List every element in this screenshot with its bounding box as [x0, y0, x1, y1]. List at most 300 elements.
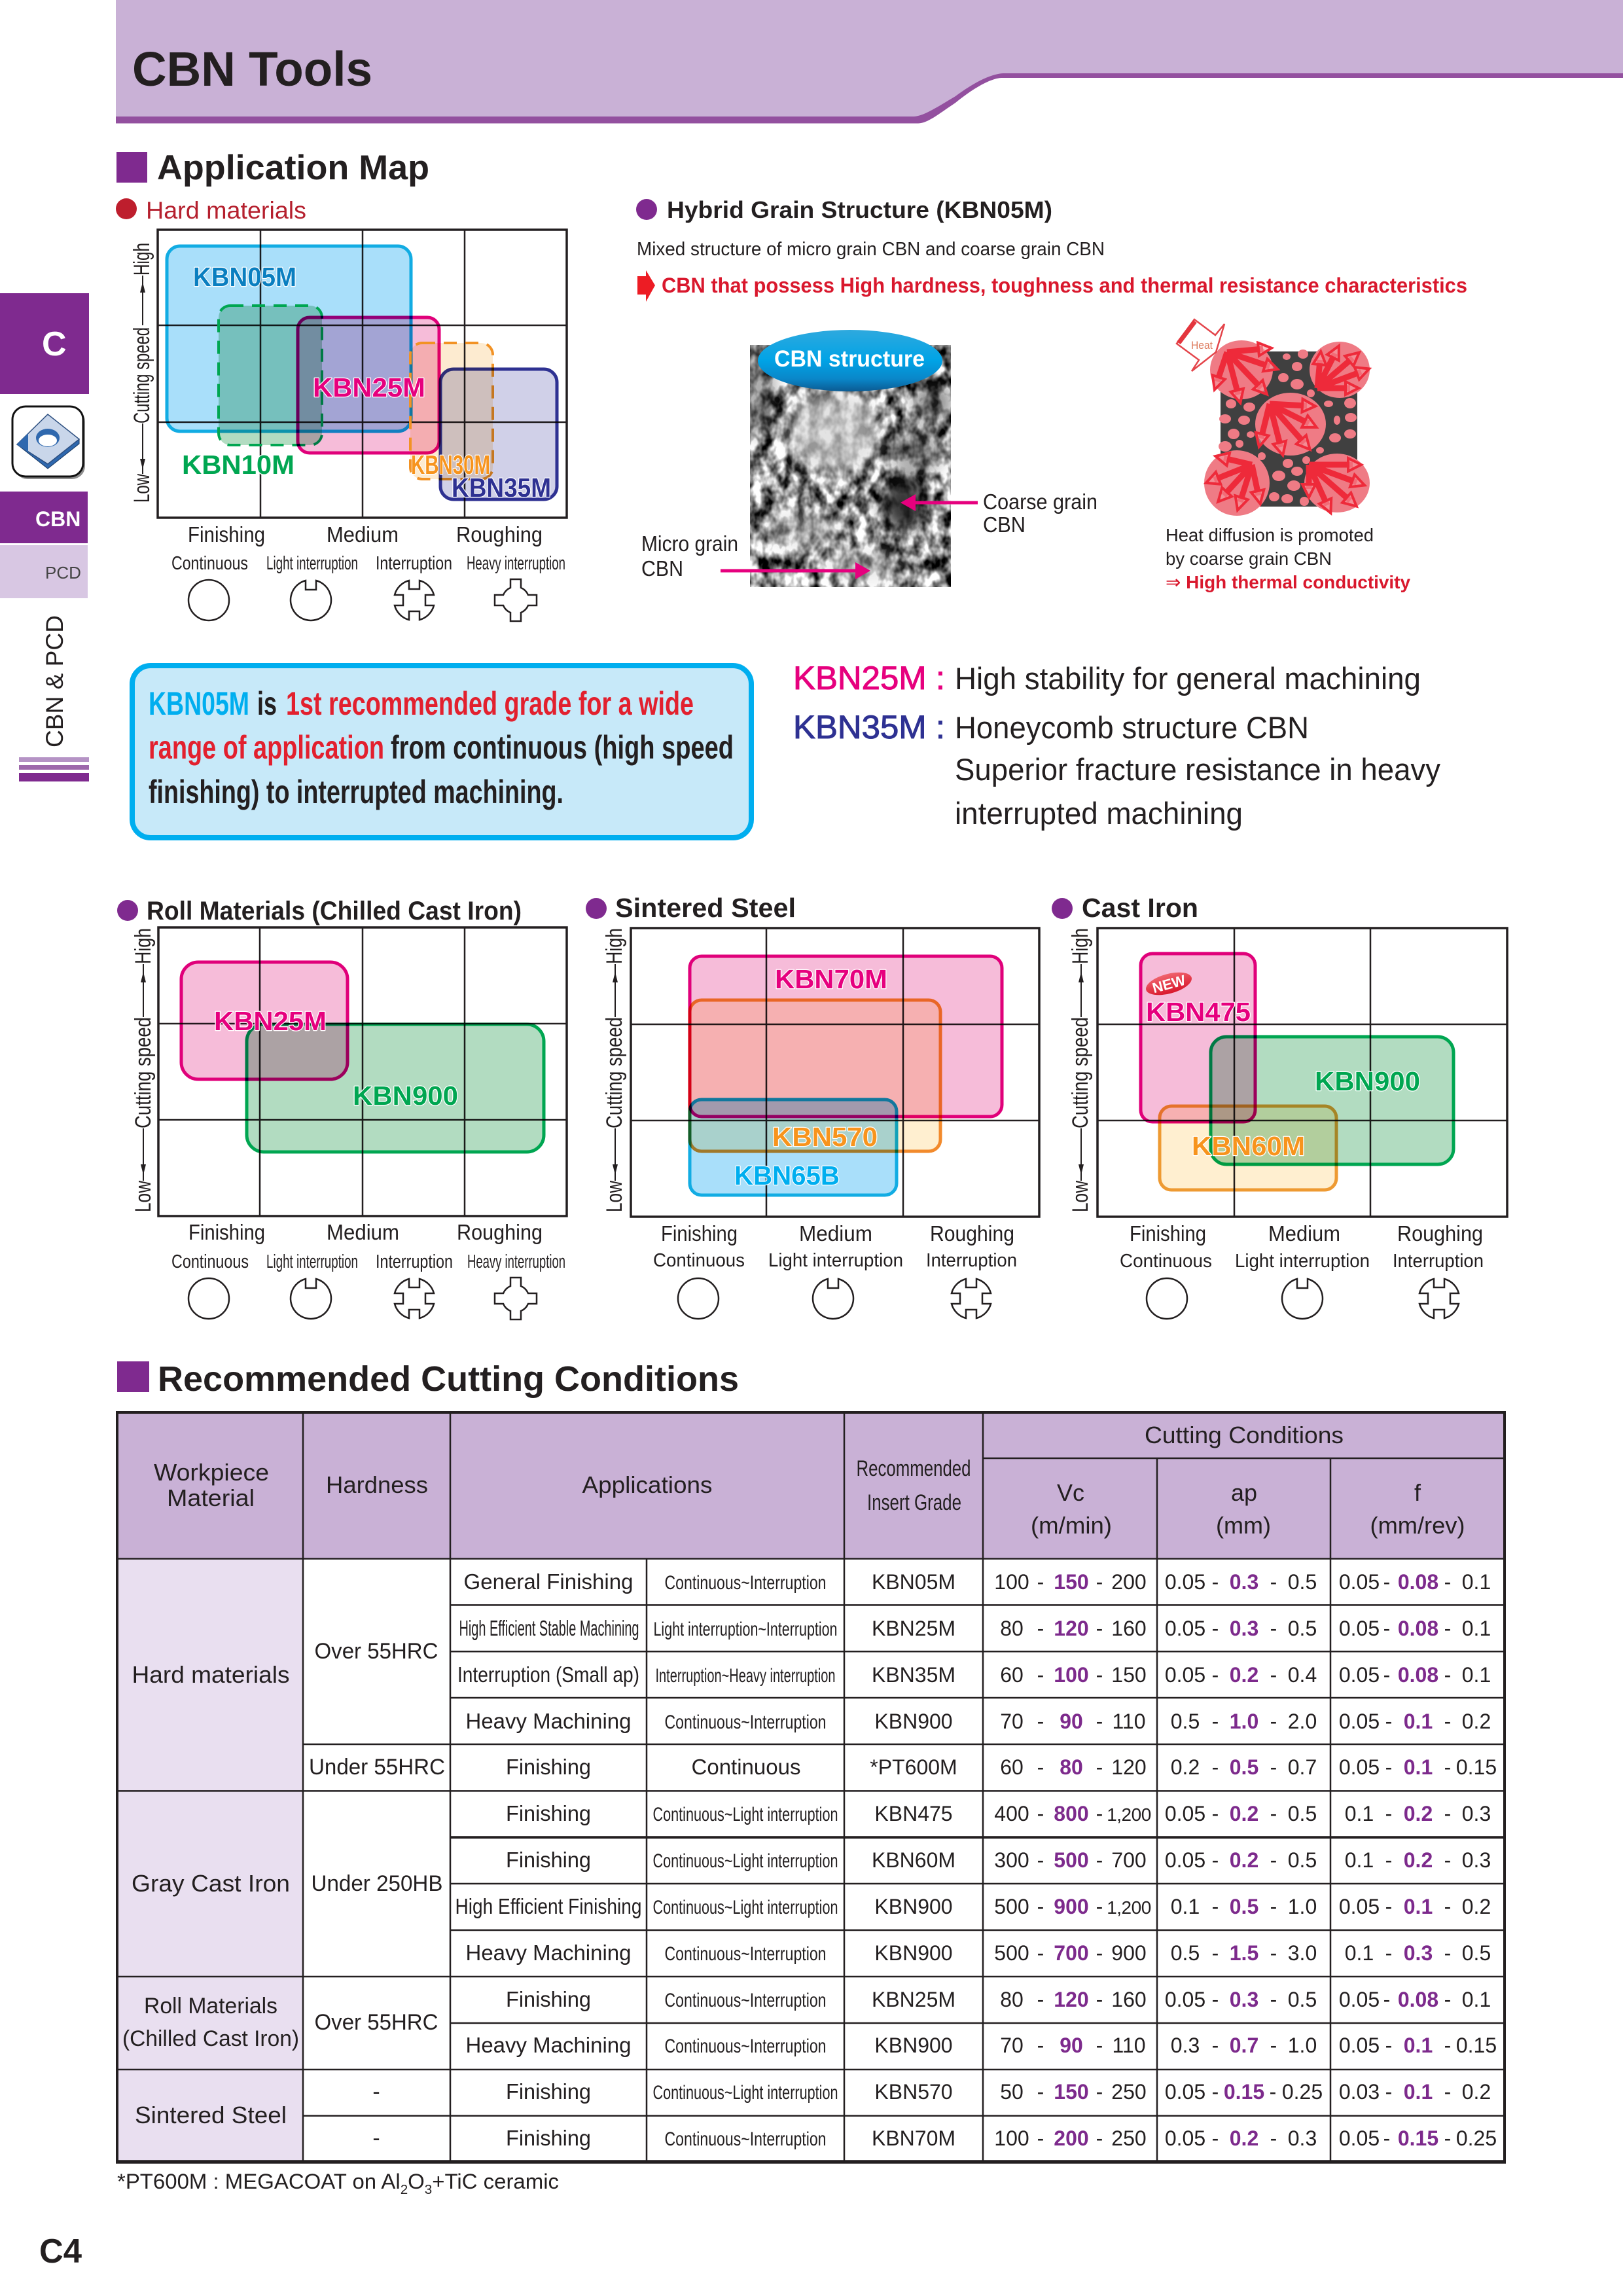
application column: General Finishing	[463, 1570, 633, 1594]
ap values: 0.05	[1165, 1988, 1205, 2011]
ap values: 0.2	[1230, 1802, 1258, 1825]
callout: Micro grain: Micro grain	[641, 531, 738, 556]
y axis: Low	[602, 1181, 627, 1212]
labels: KBN05M	[193, 262, 296, 292]
ap values: -	[1270, 1895, 1277, 1918]
footnote: +TiC ceramic	[432, 2170, 559, 2193]
ap values: 0.5	[1288, 1570, 1317, 1594]
workpiece material column	[122, 1661, 299, 2128]
text block: KBN25M and KBN35M notes: KBN25M :	[793, 660, 945, 696]
x axis labels: Interruption	[1393, 1251, 1484, 1272]
ap values: 0.5	[1288, 1802, 1317, 1825]
ap values: -	[1212, 1663, 1219, 1687]
Vc values: 150	[1054, 1570, 1089, 1594]
grade column: KBN900	[874, 1710, 953, 1733]
Vc values: 120	[1054, 1988, 1089, 2011]
Vc values: -	[1037, 1848, 1044, 1872]
y axis: Low	[131, 1181, 156, 1212]
grade column: KBN70M	[872, 2126, 955, 2150]
interruption column	[653, 1572, 838, 2150]
f values: 0.1	[1462, 1617, 1491, 1640]
icon: heat arrow: Heat	[1191, 339, 1213, 351]
ap values: -	[1212, 1848, 1219, 1872]
Vc values: 1,200	[1107, 1804, 1151, 1825]
description: Mixed structure of micro grain CBN and coarse grain CBN	[637, 239, 1105, 260]
footnote: *PT600M : MEGACOAT on Al	[117, 2170, 392, 2193]
f values: 0.1	[1462, 1570, 1491, 1594]
f values: 0.1	[1345, 1802, 1374, 1825]
x axis labels: Roughing	[930, 1221, 1014, 1246]
tab: PCD: PCD	[45, 563, 81, 583]
ap values: 0.05	[1165, 2126, 1205, 2150]
header row: (mm/rev)	[1370, 1512, 1465, 1539]
text block: KBN25M and KBN35M notes: Honeycomb structure CBN	[955, 710, 1309, 745]
red statement with arrow: CBN that possess High hardness, toughness and thermal resistance characteristics	[662, 274, 1467, 297]
f values: -	[1383, 1570, 1390, 1594]
heading: Application Map: Application Map	[157, 149, 429, 187]
labels: KBN70M	[775, 964, 887, 994]
application column: Finishing	[506, 1987, 591, 2011]
application column: Finishing	[506, 2126, 591, 2150]
ap values: 0.2	[1230, 2126, 1258, 2150]
f values: 0.1	[1345, 1941, 1374, 1965]
f values: 0.3	[1462, 1802, 1491, 1825]
f values: -	[1385, 2080, 1392, 2104]
x axis labels: Medium	[799, 1221, 872, 1246]
ap values: 0.05	[1165, 1663, 1205, 1687]
Vc values: -	[1096, 1988, 1103, 2011]
Vc values: -	[1037, 1895, 1044, 1918]
grade column: KBN60M	[872, 1848, 955, 1872]
ap values: -	[1212, 1570, 1219, 1594]
header banner with title	[116, 0, 1623, 123]
Vc values: -	[1037, 1941, 1044, 1965]
ap values: 0.7	[1288, 1755, 1317, 1779]
Vc values: -	[1096, 1895, 1103, 1918]
caption: heat diffusion: by coarse grain CBN	[1166, 548, 1332, 569]
badge: NEW	[1143, 968, 1194, 999]
region KBN900	[247, 1024, 544, 1152]
f values: 0.05	[1339, 2034, 1380, 2057]
labels	[1146, 997, 1420, 1161]
labels: KBN900	[1315, 1066, 1420, 1096]
labels: KBN65B	[734, 1160, 840, 1191]
Vc values: 60	[1000, 1755, 1024, 1779]
ap values: -	[1270, 1570, 1277, 1594]
f values: -	[1385, 1755, 1392, 1779]
f values: 0.2	[1404, 1802, 1433, 1825]
ap values: -	[1212, 1941, 1219, 1965]
grade column: KBN570	[874, 2080, 953, 2104]
application column: Finishing	[506, 2079, 591, 2104]
ap values: -	[1270, 1802, 1277, 1825]
hardness column: Over 55HRC	[314, 2010, 438, 2035]
grade column: KBN05M	[872, 1570, 955, 1594]
grade column: KBN900	[874, 1895, 953, 1918]
icon: CBN insert	[12, 406, 85, 479]
region KBN65B	[690, 1100, 897, 1195]
grade column: KBN25M	[872, 1988, 955, 2011]
f values: 0.05	[1339, 1663, 1380, 1687]
Vc values: 50	[1000, 2080, 1024, 2104]
ap values: -	[1212, 2080, 1219, 2104]
ap values: -	[1212, 1755, 1219, 1779]
ap values: -	[1270, 2080, 1276, 2104]
f values: 0.1	[1404, 1755, 1433, 1779]
Vc values: 120	[1111, 1755, 1147, 1779]
interruption column: Continuous~Light interruption	[653, 1897, 838, 1918]
Vc values: -	[1096, 1570, 1103, 1594]
ap values: 0.4	[1288, 1663, 1317, 1687]
photo: CBN structure	[743, 330, 952, 587]
Vc values: 80	[1000, 1617, 1024, 1640]
Vc values: -	[1037, 1710, 1044, 1733]
header row: Cutting Conditions	[1145, 1422, 1344, 1448]
application column: Finishing	[506, 1755, 591, 1779]
cut icons	[678, 1278, 991, 1319]
f values: -	[1444, 1988, 1451, 2011]
table: recommended cutting conditions	[116, 1412, 1506, 2162]
x axis labels	[1120, 1221, 1484, 1272]
f values: 0.05	[1339, 1895, 1380, 1918]
ap values: 0.5	[1230, 1895, 1258, 1918]
region KBN05M	[167, 246, 411, 431]
Vc values: 110	[1112, 2034, 1146, 2057]
ap values: 0.7	[1230, 2034, 1258, 2057]
ap values: 0.3	[1288, 2126, 1317, 2150]
Vc values: -	[1037, 2080, 1044, 2104]
Vc values: 150	[1111, 1663, 1147, 1687]
caption: heat diffusion: ⇒ High thermal conductivity	[1166, 572, 1410, 592]
tab: CBN	[0, 492, 88, 543]
hardness column: -	[372, 2079, 380, 2104]
f values: 0.05	[1339, 2126, 1380, 2150]
workpiece material column: (Chilled Cast Iron)	[122, 2026, 299, 2051]
icon: heat arrow	[1177, 319, 1224, 371]
application column: Finishing	[506, 1801, 591, 1825]
x axis labels: Roughing	[456, 522, 543, 547]
ap values	[1165, 1570, 1323, 2150]
f values: -	[1383, 1663, 1390, 1687]
Vc values: 120	[1054, 1617, 1089, 1640]
f values: 0.05	[1339, 1710, 1380, 1733]
f values: 0.15	[1456, 1755, 1497, 1779]
x axis labels: Medium	[327, 1220, 399, 1244]
Vc values: 800	[1054, 1802, 1089, 1825]
f values: -	[1385, 1895, 1392, 1918]
f values: -	[1385, 1941, 1392, 1965]
header row: ap	[1231, 1479, 1257, 1506]
f values: -	[1444, 1570, 1451, 1594]
Vc values: -	[1096, 2080, 1103, 2104]
f values: -	[1444, 1848, 1451, 1872]
callout: Micro grain	[641, 531, 870, 581]
region KBN70M	[690, 956, 1002, 1117]
Vc values: 160	[1111, 1988, 1147, 2011]
tab: PCD	[0, 545, 88, 598]
grade column: KBN35M	[872, 1663, 955, 1687]
Vc values: -	[1037, 2126, 1044, 2150]
f values: 0.15	[1398, 2126, 1438, 2150]
labels: KBN900	[353, 1081, 458, 1111]
ap values: 0.15	[1224, 2080, 1264, 2104]
interruption column: Light interruption~Interruption	[653, 1619, 838, 1640]
ap values: 0.05	[1165, 2080, 1205, 2104]
panel: Hybrid grain structure	[636, 196, 1467, 592]
header row: Vc	[1057, 1479, 1084, 1506]
x axis labels: Light interruption	[768, 1250, 903, 1271]
Vc values: -	[1037, 1570, 1044, 1594]
ap values: 1.5	[1230, 1941, 1258, 1965]
Vc values: -	[1037, 1617, 1044, 1640]
header row: Material	[167, 1484, 255, 1511]
callout: KBN05M recommendation: range of application	[149, 729, 384, 766]
region KBN10M	[219, 306, 322, 445]
x axis labels: Heavy interruption	[467, 1251, 565, 1272]
cut icons	[188, 579, 537, 621]
ap values: -	[1270, 1755, 1277, 1779]
text block: KBN25M and KBN35M notes: Superior fracture resistance in heavy	[955, 752, 1440, 787]
text block: KBN25M and KBN35M notes: interrupted machining	[955, 796, 1243, 831]
ap values: 0.05	[1165, 1570, 1205, 1594]
f values: -	[1385, 1848, 1392, 1872]
hardness column	[309, 1639, 445, 2151]
region KBN60M	[1160, 1106, 1336, 1190]
interruption column: Continuous	[691, 1755, 801, 1779]
ap values: -	[1212, 2126, 1219, 2150]
f values: 0.05	[1339, 1988, 1380, 2011]
Vc values: 300	[994, 1848, 1029, 1872]
hardness column: Under 250HB	[312, 1871, 442, 1896]
f values: 0.1	[1462, 1663, 1491, 1687]
application column: Heavy Machining	[466, 1941, 631, 1965]
ap values: -	[1212, 1988, 1219, 2011]
Vc values: 100	[994, 2126, 1029, 2150]
Vc values: 200	[1054, 2126, 1089, 2150]
Vc values: 400	[994, 1802, 1029, 1825]
ap values: 1.0	[1230, 1710, 1258, 1733]
caption: heat diffusion: Heat diffusion is promoted	[1166, 525, 1374, 545]
Vc values: 100	[994, 1570, 1029, 1594]
f values: 0.08	[1398, 1617, 1438, 1640]
Vc values: 900	[1111, 1941, 1147, 1965]
Vc values: -	[1096, 1848, 1103, 1872]
interruption column: Continuous~Light interruption	[653, 2082, 838, 2104]
x axis labels: Light interruption	[266, 1251, 358, 1272]
labels: KBN10M	[182, 450, 294, 480]
callout: KBN05M recommendation	[132, 666, 751, 838]
f values: -	[1444, 2126, 1451, 2150]
labels: KBN25M	[214, 1006, 327, 1036]
Vc values: -	[1037, 1988, 1044, 2011]
f values: 0.1	[1345, 1848, 1374, 1872]
tab: CBN: CBN	[35, 507, 80, 531]
f values: 0.1	[1404, 2080, 1433, 2104]
labels	[214, 1006, 458, 1111]
region KBN25M	[181, 962, 348, 1079]
cut icons	[1147, 1278, 1459, 1319]
ap values: -	[1270, 1710, 1277, 1733]
footnote: O	[408, 2170, 425, 2193]
Vc values: 90	[1060, 2034, 1083, 2057]
interruption column: Continuous~Interruption	[665, 2036, 826, 2057]
panel: Roll materials chart	[117, 897, 567, 1319]
f values: -	[1383, 1988, 1390, 2011]
ap values: 0.5	[1288, 1617, 1317, 1640]
f values: -	[1444, 1802, 1451, 1825]
subheading: Sintered Steel	[615, 893, 796, 923]
labels: KBN35M	[452, 473, 551, 503]
Vc values: 150	[1054, 2080, 1089, 2104]
ap values: -	[1212, 1802, 1219, 1825]
x axis labels: Interruption	[376, 1251, 453, 1272]
ap values: -	[1270, 1941, 1277, 1965]
x axis labels: Interruption	[376, 553, 452, 574]
ap values: -	[1270, 2126, 1277, 2150]
y axis: High	[130, 243, 154, 276]
callout: KBN05M recommendation: is	[257, 685, 277, 722]
f values: 0.08	[1398, 1663, 1438, 1687]
hardness column: Under 55HRC	[309, 1755, 445, 1780]
header row: Applications	[582, 1471, 712, 1498]
Vc values: -	[1096, 1802, 1103, 1825]
ap values: 0.05	[1165, 1617, 1205, 1640]
y axis	[131, 928, 156, 1212]
title: CBN Tools	[132, 42, 372, 96]
hardness column: -	[372, 2126, 380, 2151]
ap values: -	[1270, 1663, 1277, 1687]
ap values: 0.5	[1288, 1848, 1317, 1872]
interruption column: Continuous~Interruption	[665, 1943, 826, 1965]
interruption column: Continuous~Light interruption	[653, 1804, 838, 1825]
grade column: KBN475	[874, 1802, 953, 1825]
f values: 0.5	[1462, 1941, 1491, 1965]
f values: 0.1	[1404, 2034, 1433, 2057]
f values: -	[1444, 1663, 1451, 1687]
ap values: 0.2	[1230, 1848, 1258, 1872]
Vc values: -	[1096, 2126, 1103, 2150]
ap values: 0.3	[1230, 1570, 1258, 1594]
footnote: 3	[425, 2183, 432, 2197]
y axis: High	[1068, 928, 1093, 964]
callout: KBN05M recommendation: KBN05M	[149, 685, 249, 722]
text block: KBN25M and KBN35M notes: High stability for general machining	[955, 661, 1421, 696]
f values: 0.08	[1398, 1988, 1438, 2011]
x axis labels: Heavy interruption	[467, 553, 565, 574]
f values: 0.2	[1462, 1710, 1491, 1733]
Vc values: 80	[1000, 1988, 1024, 2011]
f values: 0.05	[1339, 1570, 1380, 1594]
ap values: 0.2	[1171, 1755, 1200, 1779]
header row: (m/min)	[1031, 1512, 1112, 1539]
header row: f	[1414, 1479, 1421, 1506]
Vc values: -	[1096, 1710, 1103, 1733]
Vc values: 70	[1000, 1710, 1024, 1733]
ap values: 0.3	[1171, 2034, 1200, 2057]
f values: 0.1	[1404, 1895, 1433, 1918]
y axis: Cutting speed	[1068, 1017, 1093, 1128]
labels: KBN60M	[1192, 1131, 1305, 1161]
ap values: 0.1	[1171, 1895, 1200, 1918]
f values: -	[1383, 2126, 1390, 2150]
x axis labels: Finishing	[188, 1220, 265, 1244]
application column: High Efficient Finishing	[455, 1894, 641, 1918]
tab: C	[0, 293, 89, 394]
labels	[734, 964, 887, 1191]
y axis	[602, 928, 627, 1212]
application column	[455, 1570, 641, 2150]
ap values: -	[1212, 1617, 1219, 1640]
y axis: Low	[130, 474, 154, 503]
page number: C4	[39, 2233, 82, 2270]
ap values: 2.0	[1288, 1710, 1317, 1733]
y axis: High	[602, 928, 627, 964]
region KBN30M	[410, 343, 493, 479]
Vc values: 250	[1111, 2080, 1147, 2104]
application column: Interruption (Small ap)	[457, 1662, 639, 1687]
ap values: -	[1270, 1988, 1277, 2011]
workpiece material column: Sintered Steel	[135, 2102, 287, 2128]
f values: 0.2	[1404, 1848, 1433, 1872]
application column: Finishing	[506, 1848, 591, 1872]
x axis labels: Light interruption	[1235, 1251, 1370, 1272]
subheading: Hard materials	[146, 197, 306, 224]
Vc values: -	[1096, 2034, 1103, 2057]
Vc values: 200	[1111, 1570, 1147, 1594]
region KBN475	[1141, 954, 1255, 1122]
labels: KBN25M	[313, 372, 425, 403]
ap values: -	[1270, 2034, 1277, 2057]
f values: -	[1385, 2034, 1392, 2057]
labels: KBN570	[772, 1122, 878, 1152]
interruption column: Interruption~Heavy interruption	[656, 1665, 835, 1687]
Vc values: 90	[1060, 1710, 1083, 1733]
ap values: 0.5	[1230, 1755, 1258, 1779]
f values: -	[1385, 1802, 1392, 1825]
header row: Insert Grade	[867, 1490, 961, 1515]
workpiece material column: Hard materials	[132, 1661, 289, 1688]
f values: 0.05	[1339, 1617, 1380, 1640]
grade column: KBN900	[874, 2034, 953, 2057]
x axis labels	[653, 1221, 1017, 1271]
region KBN570	[690, 1000, 940, 1151]
Vc values: 700	[1054, 1941, 1089, 1965]
Vc values: 60	[1000, 1663, 1024, 1687]
grade column: KBN900	[874, 1941, 953, 1965]
interruption column: Continuous~Interruption	[665, 1572, 826, 1594]
x axis labels: Medium	[1268, 1221, 1340, 1246]
cut icons	[188, 1278, 537, 1319]
interruption column: Continuous~Interruption	[665, 2128, 826, 2150]
y axis: Cutting speed	[130, 327, 154, 423]
heading: Recommended Cutting Conditions: Recommended Cutting Conditions	[158, 1359, 739, 1399]
Vc values: 250	[1111, 2126, 1147, 2150]
header row: Workpiece	[154, 1459, 269, 1486]
f values: 0.2	[1462, 1895, 1491, 1918]
callout: KBN05M recommendation: from continuous (high speed	[391, 729, 734, 766]
caption: heat diffusion	[1166, 525, 1410, 592]
f values: 0.3	[1404, 1941, 1433, 1965]
x axis labels: Medium	[327, 522, 399, 547]
x axis labels: Finishing	[188, 522, 265, 547]
x axis labels: Light interruption	[266, 553, 358, 574]
footnote: 2	[401, 2183, 408, 2197]
f values: 0.15	[1456, 2034, 1497, 2057]
interruption column: Continuous~Interruption	[665, 1990, 826, 2011]
Vc values: 70	[1000, 2034, 1024, 2057]
Vc values	[994, 1570, 1151, 2150]
x axis labels: Finishing	[661, 1221, 738, 1246]
